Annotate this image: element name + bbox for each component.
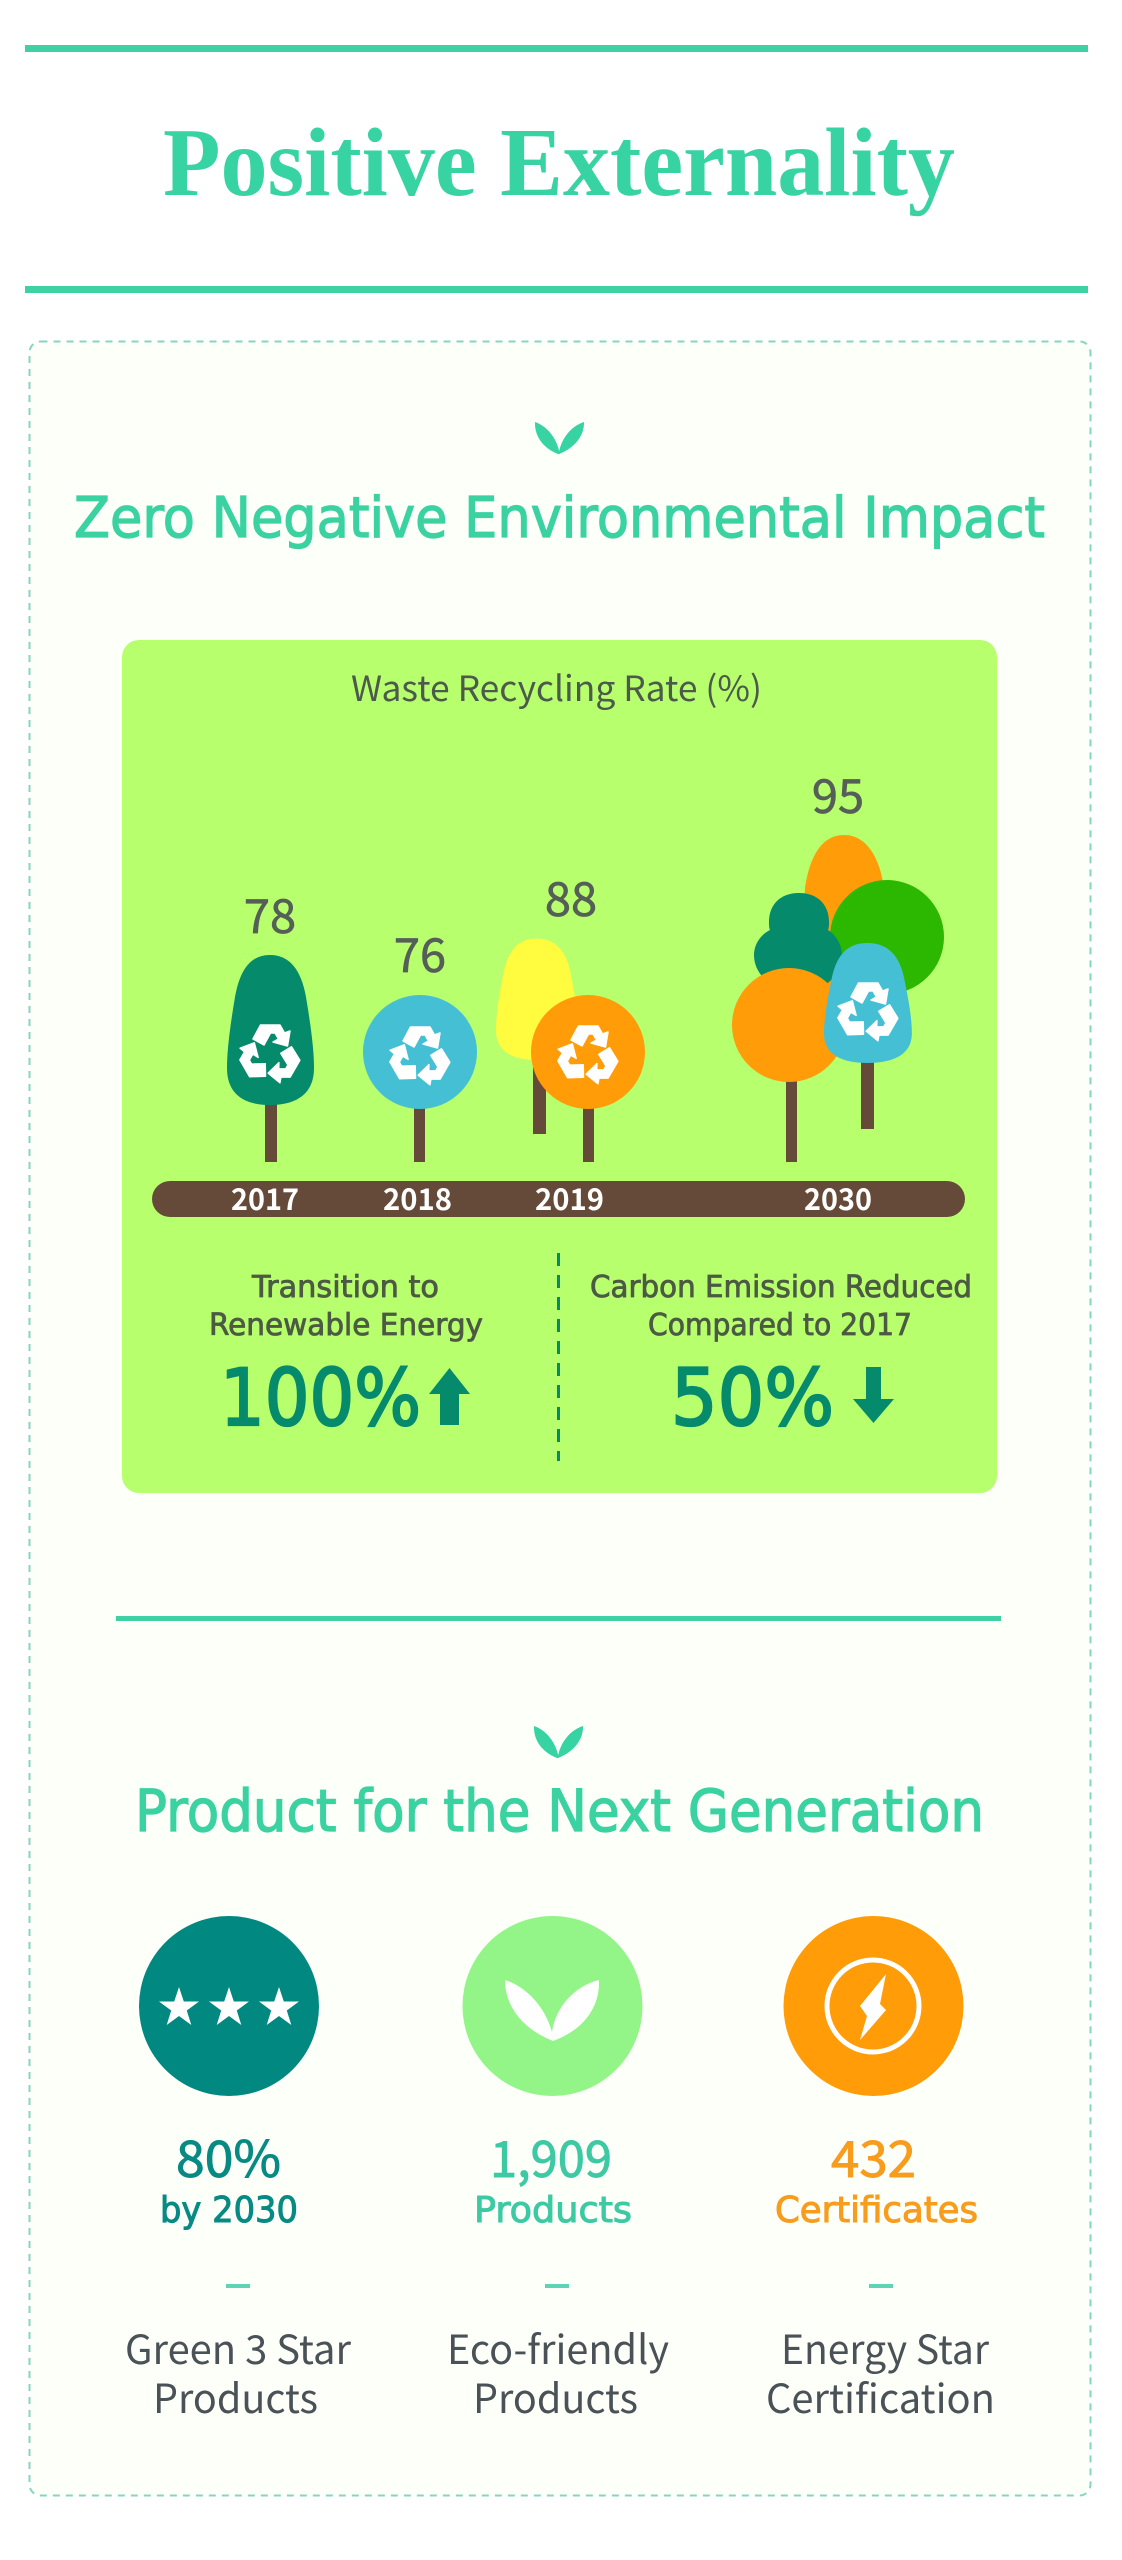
stat: renewable energy [209,1270,483,1444]
unit: Products [474,2190,632,2231]
panel: content frame [30,342,1090,2496]
label: Energy Star [781,2318,989,2376]
chart title: Waste Recycling Rate (%) [351,661,762,712]
column: eco-friendly [447,1916,669,2425]
stat: renewable energy: Transition to [251,1270,439,1305]
label: Eco-friendly [447,2318,669,2376]
stat: renewable energy: Renewable Energy [209,1308,483,1343]
heading: product for the next generation: Product for the Next Generation [135,1777,984,1845]
value 95: 95 [812,758,864,827]
year 2030: 2030 [804,1175,872,1219]
stat: carbon emission: Compared to 2017 [648,1308,912,1343]
stat: renewable energy: 100% [220,1354,421,1444]
trees 2030 [732,835,944,1162]
year 2018: 2018 [383,1175,452,1219]
icon: lightning badge [784,1916,964,2096]
tree 2018 [363,995,477,1162]
stat: carbon emission: 50% [671,1354,834,1444]
arrow down [853,1367,894,1423]
trees 2019 [496,938,645,1162]
divider [557,1253,560,1461]
timeline bar [152,1175,965,1219]
stat: carbon emission: Carbon Emission Reduced [590,1270,972,1305]
value: 1,909 [490,2120,612,2192]
icon: heading leaf 1 [535,422,584,454]
tree 2017 [227,955,314,1162]
value: 80% [176,2120,281,2192]
label: Green 3 Star [125,2318,351,2376]
column: green 3 star [125,1916,351,2425]
dash [869,2284,893,2288]
year 2019: 2019 [535,1175,604,1219]
stat: carbon emission [590,1270,972,1444]
value 88: 88 [545,861,597,930]
value 78: 78 [244,878,296,947]
label: Certification [766,2367,995,2425]
top rule [25,45,1088,52]
column: energy star [766,1916,995,2425]
unit: Certificates [775,2190,978,2231]
label: Products [473,2367,638,2425]
unit: by 2030 [160,2190,298,2231]
section divider [116,1616,1001,1621]
value 76: 76 [394,917,446,986]
label: Products [153,2367,318,2425]
title: Positive Externality [163,109,955,217]
icon: leaf [462,1916,642,2096]
bottom rule [25,286,1088,293]
icon: three stars [139,1916,319,2096]
dash [226,2284,250,2288]
year 2017: 2017 [231,1175,299,1219]
value: 432 [831,2120,916,2192]
heading: zero negative environmental impact: Zero Negative Environmental Impact [74,486,1045,551]
dash [545,2284,569,2288]
panel: waste recycling chart [122,640,997,1493]
icon: heading leaf 2 [534,1726,583,1758]
arrow up [429,1368,470,1425]
